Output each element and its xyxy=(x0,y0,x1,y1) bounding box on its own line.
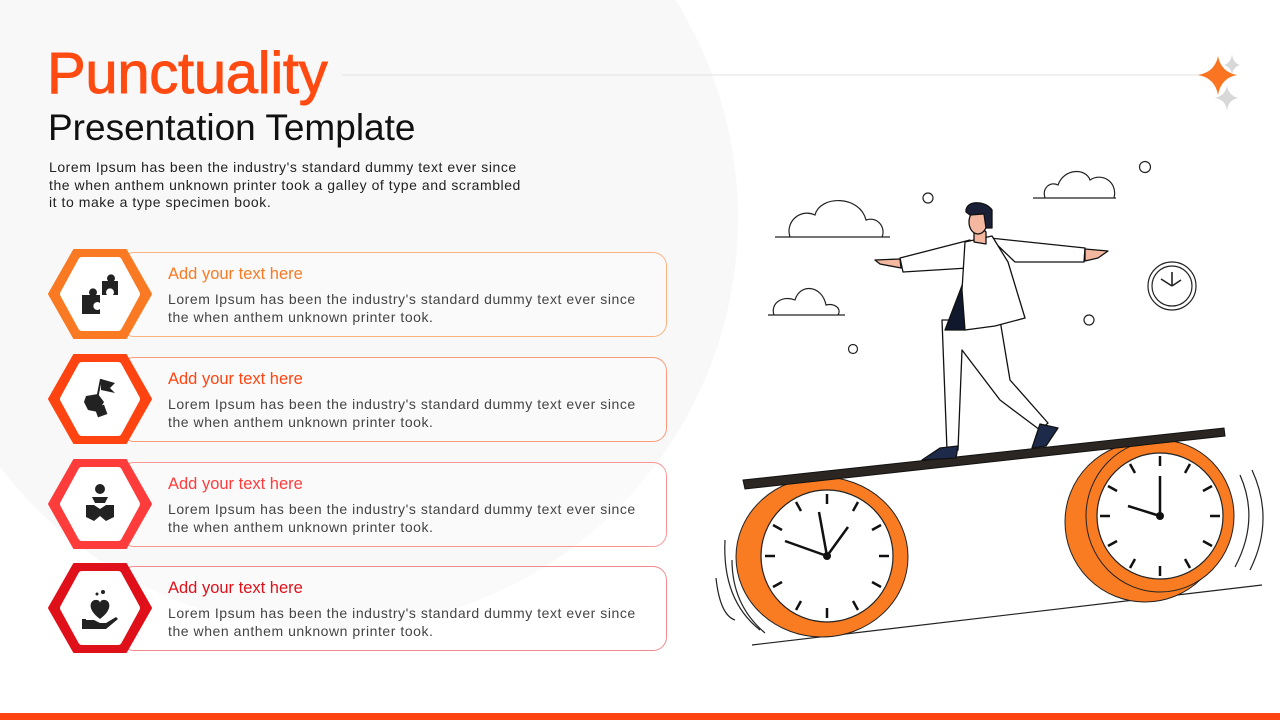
item 2 xyxy=(48,354,667,444)
plank xyxy=(743,428,1225,489)
item 4: the when anthem unknown printer took. xyxy=(168,622,434,638)
description: the when anthem unknown printer took a galley of type and scrambled xyxy=(49,176,521,192)
description: Lorem Ipsum has been the industry's standard dummy text ever since xyxy=(49,159,517,175)
clouds xyxy=(768,162,1196,354)
description: it to make a type specimen book. xyxy=(49,194,271,210)
item 4: Lorem Ipsum has been the industry's standard dummy text ever since xyxy=(168,605,636,621)
item 2: Add your text here xyxy=(168,370,303,388)
description xyxy=(49,159,521,210)
item 3: the when anthem unknown printer took. xyxy=(168,518,434,534)
hexagon icon: heart in hand xyxy=(48,563,152,653)
left clock xyxy=(736,477,908,637)
item 1: the when anthem unknown printer took. xyxy=(168,308,434,324)
right clock xyxy=(1065,440,1234,602)
item 4 xyxy=(48,563,667,653)
ground and motion lines xyxy=(716,470,1263,645)
item 1: Add your text here xyxy=(168,265,303,283)
illustration: man balancing on plank over clocks xyxy=(715,160,1264,646)
subtitle: Presentation Template xyxy=(48,107,416,148)
man xyxy=(875,203,1108,460)
hexagon icon: handshake xyxy=(48,459,152,549)
hexagon icon: flag hand xyxy=(48,354,152,444)
header line with sparkles xyxy=(342,54,1240,110)
title: Punctuality xyxy=(47,41,327,106)
bottom bar xyxy=(0,713,1280,720)
item 3 xyxy=(48,459,667,549)
item 1: Lorem Ipsum has been the industry's standard dummy text ever since xyxy=(168,291,636,307)
item 3: Add your text here xyxy=(168,475,303,493)
item 4: Add your text here xyxy=(168,579,303,597)
item 2: Lorem Ipsum has been the industry's standard dummy text ever since xyxy=(168,396,636,412)
item 1 xyxy=(48,249,667,339)
hexagon icon: puzzle xyxy=(48,249,152,339)
item 2: the when anthem unknown printer took. xyxy=(168,414,434,430)
background circle xyxy=(0,0,738,629)
item 3: Lorem Ipsum has been the industry's standard dummy text ever since xyxy=(168,501,636,517)
